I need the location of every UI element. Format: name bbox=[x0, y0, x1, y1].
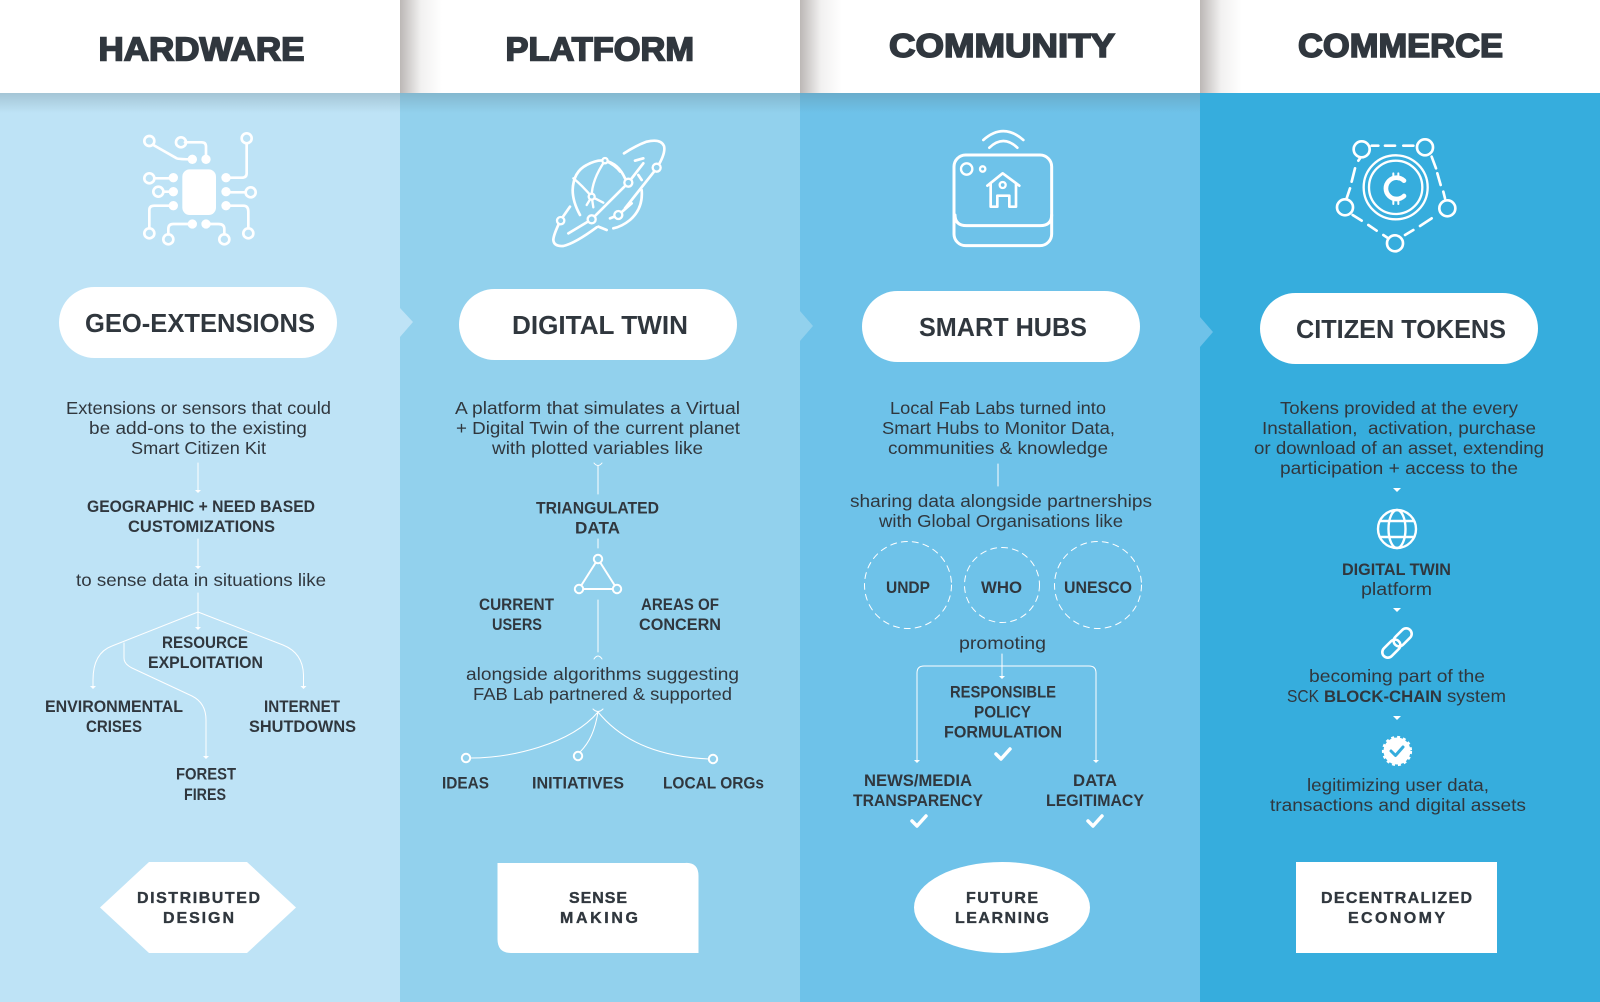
partner: undp bbox=[864, 542, 952, 628]
text: triangulated data: DATA bbox=[575, 520, 620, 538]
heading: commerce: COMMERCE bbox=[1298, 27, 1503, 64]
badge: distributed design bbox=[100, 862, 296, 953]
label: data legitimacy bbox=[1046, 772, 1144, 826]
notch: platform to community bbox=[800, 311, 813, 341]
pill: digital twin: DIGITAL TWIN bbox=[512, 310, 688, 340]
label: forest fires: FOREST bbox=[176, 766, 236, 784]
text: blockchain bbox=[1287, 666, 1506, 706]
label: internet shutdowns: INTERNET bbox=[264, 698, 340, 716]
label: news media transparency: NEWS/MEDIA bbox=[864, 772, 972, 790]
label: current users: CURRENT bbox=[479, 596, 554, 614]
icon: triangle nodes bbox=[575, 539, 621, 593]
label: forest fires: FIRES bbox=[184, 786, 226, 804]
text: blockchain: BLOCK-CHAIN bbox=[1324, 688, 1442, 706]
badge: future learning bbox=[914, 862, 1090, 953]
label: data legitimacy: DATA bbox=[1073, 772, 1117, 790]
icon: citizen token network bbox=[1337, 139, 1455, 251]
text: platform intro bbox=[455, 398, 740, 458]
partner: unesco bbox=[1054, 542, 1142, 628]
text: triangulated data bbox=[536, 500, 659, 538]
connectors: algorithm branches bbox=[462, 709, 717, 763]
icon: chain link bbox=[1380, 626, 1414, 660]
text: promoting: promoting bbox=[959, 633, 1046, 653]
label: responsible policy formulation: POLICY bbox=[974, 704, 1031, 722]
text: triangulated data: TRIANGULATED bbox=[536, 500, 659, 518]
connector: intro to partnerships bbox=[997, 464, 999, 486]
partner: who: WHO bbox=[981, 579, 1022, 597]
text: legitimizing: legitimizing user data, bbox=[1307, 775, 1489, 795]
text: digital twin platform: platform bbox=[1361, 579, 1432, 599]
label: local orgs: LOCAL ORGs bbox=[663, 774, 764, 792]
text: platform intro: + Digital Twin of the current planet bbox=[456, 418, 740, 438]
text: commerce intro: participation + access to the bbox=[1280, 458, 1518, 478]
text: hardware intro: Smart Citizen Kit bbox=[131, 438, 266, 458]
text: customizations bbox=[87, 498, 315, 536]
badge: distributed design: DESIGN bbox=[163, 910, 234, 927]
badge: future learning: LEARNING bbox=[955, 910, 1049, 927]
text: digital twin platform bbox=[1342, 561, 1451, 599]
label: current users bbox=[479, 596, 554, 634]
text: partnerships bbox=[850, 491, 1152, 531]
label: resource exploitation: EXPLOITATION bbox=[148, 654, 263, 672]
badge: distributed design: DISTRIBUTED bbox=[137, 890, 260, 907]
notch: hardware to platform bbox=[400, 308, 413, 337]
arrows: situation branches bbox=[90, 593, 306, 759]
text: community intro: communities & knowledge bbox=[888, 438, 1108, 458]
text: commerce intro: Installation, activation, purchase bbox=[1262, 418, 1536, 438]
badge: sense making: SENSE bbox=[569, 890, 627, 907]
text: blockchain: SCK bbox=[1287, 686, 1319, 706]
pill: geo-extensions: GEO-EXTENSIONS bbox=[85, 308, 315, 338]
label: areas of concern: CONCERN bbox=[639, 616, 721, 634]
text: partnerships: with Global Organisations like bbox=[878, 511, 1123, 531]
text: customizations: CUSTOMIZATIONS bbox=[128, 518, 275, 536]
label: initiatives: INITIATIVES bbox=[532, 774, 624, 792]
label: data legitimacy: LEGITIMACY bbox=[1046, 792, 1144, 810]
label: responsible policy formulation: RESPONSIBLE bbox=[950, 684, 1056, 702]
connector: intro to triangulated data bbox=[594, 463, 602, 494]
arrow: digital twin to chain bbox=[1393, 608, 1401, 612]
text: community intro: Smart Hubs to Monitor Data, bbox=[882, 418, 1115, 438]
panel: community bbox=[800, 0, 1200, 1002]
arrow: intro to digital twin bbox=[1393, 488, 1401, 492]
arrow: intro to customizations bbox=[195, 463, 201, 493]
notch: community to commerce bbox=[1200, 317, 1213, 347]
label: forest fires bbox=[176, 766, 236, 804]
label: environmental crises: CRISES bbox=[86, 718, 142, 736]
partner: undp: UNDP bbox=[886, 579, 930, 597]
label: resource exploitation bbox=[148, 634, 263, 672]
pill: smart hubs: SMART HUBS bbox=[919, 312, 1087, 342]
panel: commerce bbox=[1200, 0, 1600, 1002]
badge: future learning: FUTURE bbox=[966, 890, 1038, 907]
text: blockchain: system bbox=[1447, 686, 1506, 706]
label: responsible policy formulation: FORMULATION bbox=[944, 724, 1062, 742]
arrows: promoting bracket bbox=[914, 654, 1099, 763]
text: commerce intro: Tokens provided at the every bbox=[1280, 398, 1518, 418]
partner: who bbox=[964, 548, 1040, 622]
badge: sense making: MAKING bbox=[560, 910, 638, 927]
heading: hardware: HARDWARE bbox=[98, 30, 304, 68]
panel: platform bbox=[400, 0, 800, 1002]
partner: unesco: UNESCO bbox=[1064, 579, 1132, 597]
text: blockchain: becoming part of the bbox=[1309, 666, 1485, 686]
icon: globe bbox=[1378, 510, 1416, 548]
panel: hardware bbox=[0, 0, 400, 1002]
heading: community: COMMUNITY bbox=[889, 27, 1115, 64]
text: legitimizing bbox=[1270, 775, 1526, 815]
label: news media transparency bbox=[853, 772, 983, 826]
text: platform intro: A platform that simulates a Virtual bbox=[455, 398, 740, 418]
text: hardware intro bbox=[66, 398, 331, 458]
label: news media transparency: TRANSPARENCY bbox=[853, 792, 983, 810]
arrow: customizations to situations bbox=[195, 539, 201, 569]
icon: planet network bbox=[553, 141, 664, 246]
text: customizations: GEOGRAPHIC + NEED BASED bbox=[87, 498, 315, 516]
connector: triangle to algorithms bbox=[594, 600, 602, 659]
text: hardware intro: Extensions or sensors that could bbox=[66, 398, 331, 418]
label: resource exploitation: RESOURCE bbox=[162, 634, 248, 652]
pill: digital twin bbox=[459, 289, 737, 360]
text: hardware intro: be add-ons to the existing bbox=[89, 418, 307, 438]
label: current users: USERS bbox=[492, 616, 542, 634]
text: algorithms bbox=[466, 664, 739, 704]
text: partnerships: sharing data alongside partnerships bbox=[850, 491, 1152, 511]
arrow: blockchain to badge bbox=[1393, 716, 1401, 720]
pill: citizen tokens bbox=[1260, 293, 1538, 364]
label: areas of concern bbox=[639, 596, 721, 634]
heading: platform: PLATFORM bbox=[506, 30, 694, 68]
label: internet shutdowns: SHUTDOWNS bbox=[249, 718, 356, 736]
icon: smart hub bbox=[954, 131, 1052, 246]
text: algorithms: alongside algorithms suggesting bbox=[466, 664, 739, 684]
label: environmental crises bbox=[45, 698, 183, 736]
label: environmental crises: ENVIRONMENTAL bbox=[45, 698, 183, 716]
label: internet shutdowns bbox=[249, 698, 356, 736]
text: commerce intro: or download of an asset, extending bbox=[1254, 438, 1544, 458]
text: community intro bbox=[882, 398, 1115, 458]
badge: decentralized economy: ECONOMY bbox=[1348, 910, 1445, 927]
pill: citizen tokens: CITIZEN TOKENS bbox=[1296, 314, 1506, 344]
badge: sense making bbox=[498, 863, 698, 953]
icon: verified badge bbox=[1383, 737, 1411, 765]
icon: circuit chip bbox=[144, 133, 256, 244]
text: digital twin platform: DIGITAL TWIN bbox=[1342, 561, 1451, 579]
badge: decentralized economy: DECENTRALIZED bbox=[1321, 890, 1472, 907]
pill: smart hubs bbox=[862, 291, 1140, 362]
text: situations: to sense data in situations like bbox=[76, 570, 326, 590]
text: commerce intro bbox=[1254, 398, 1544, 478]
pill: geo-extensions bbox=[59, 287, 337, 358]
label: responsible policy formulation bbox=[944, 684, 1062, 759]
label: ideas: IDEAS bbox=[442, 774, 489, 792]
text: legitimizing: transactions and digital assets bbox=[1270, 795, 1526, 815]
badge: decentralized economy bbox=[1296, 862, 1497, 953]
text: platform intro: with plotted variables like bbox=[491, 438, 703, 458]
label: areas of concern: AREAS OF bbox=[641, 596, 719, 614]
text: community intro: Local Fab Labs turned into bbox=[890, 398, 1106, 418]
text: algorithms: FAB Lab partnered & supported bbox=[473, 684, 732, 704]
